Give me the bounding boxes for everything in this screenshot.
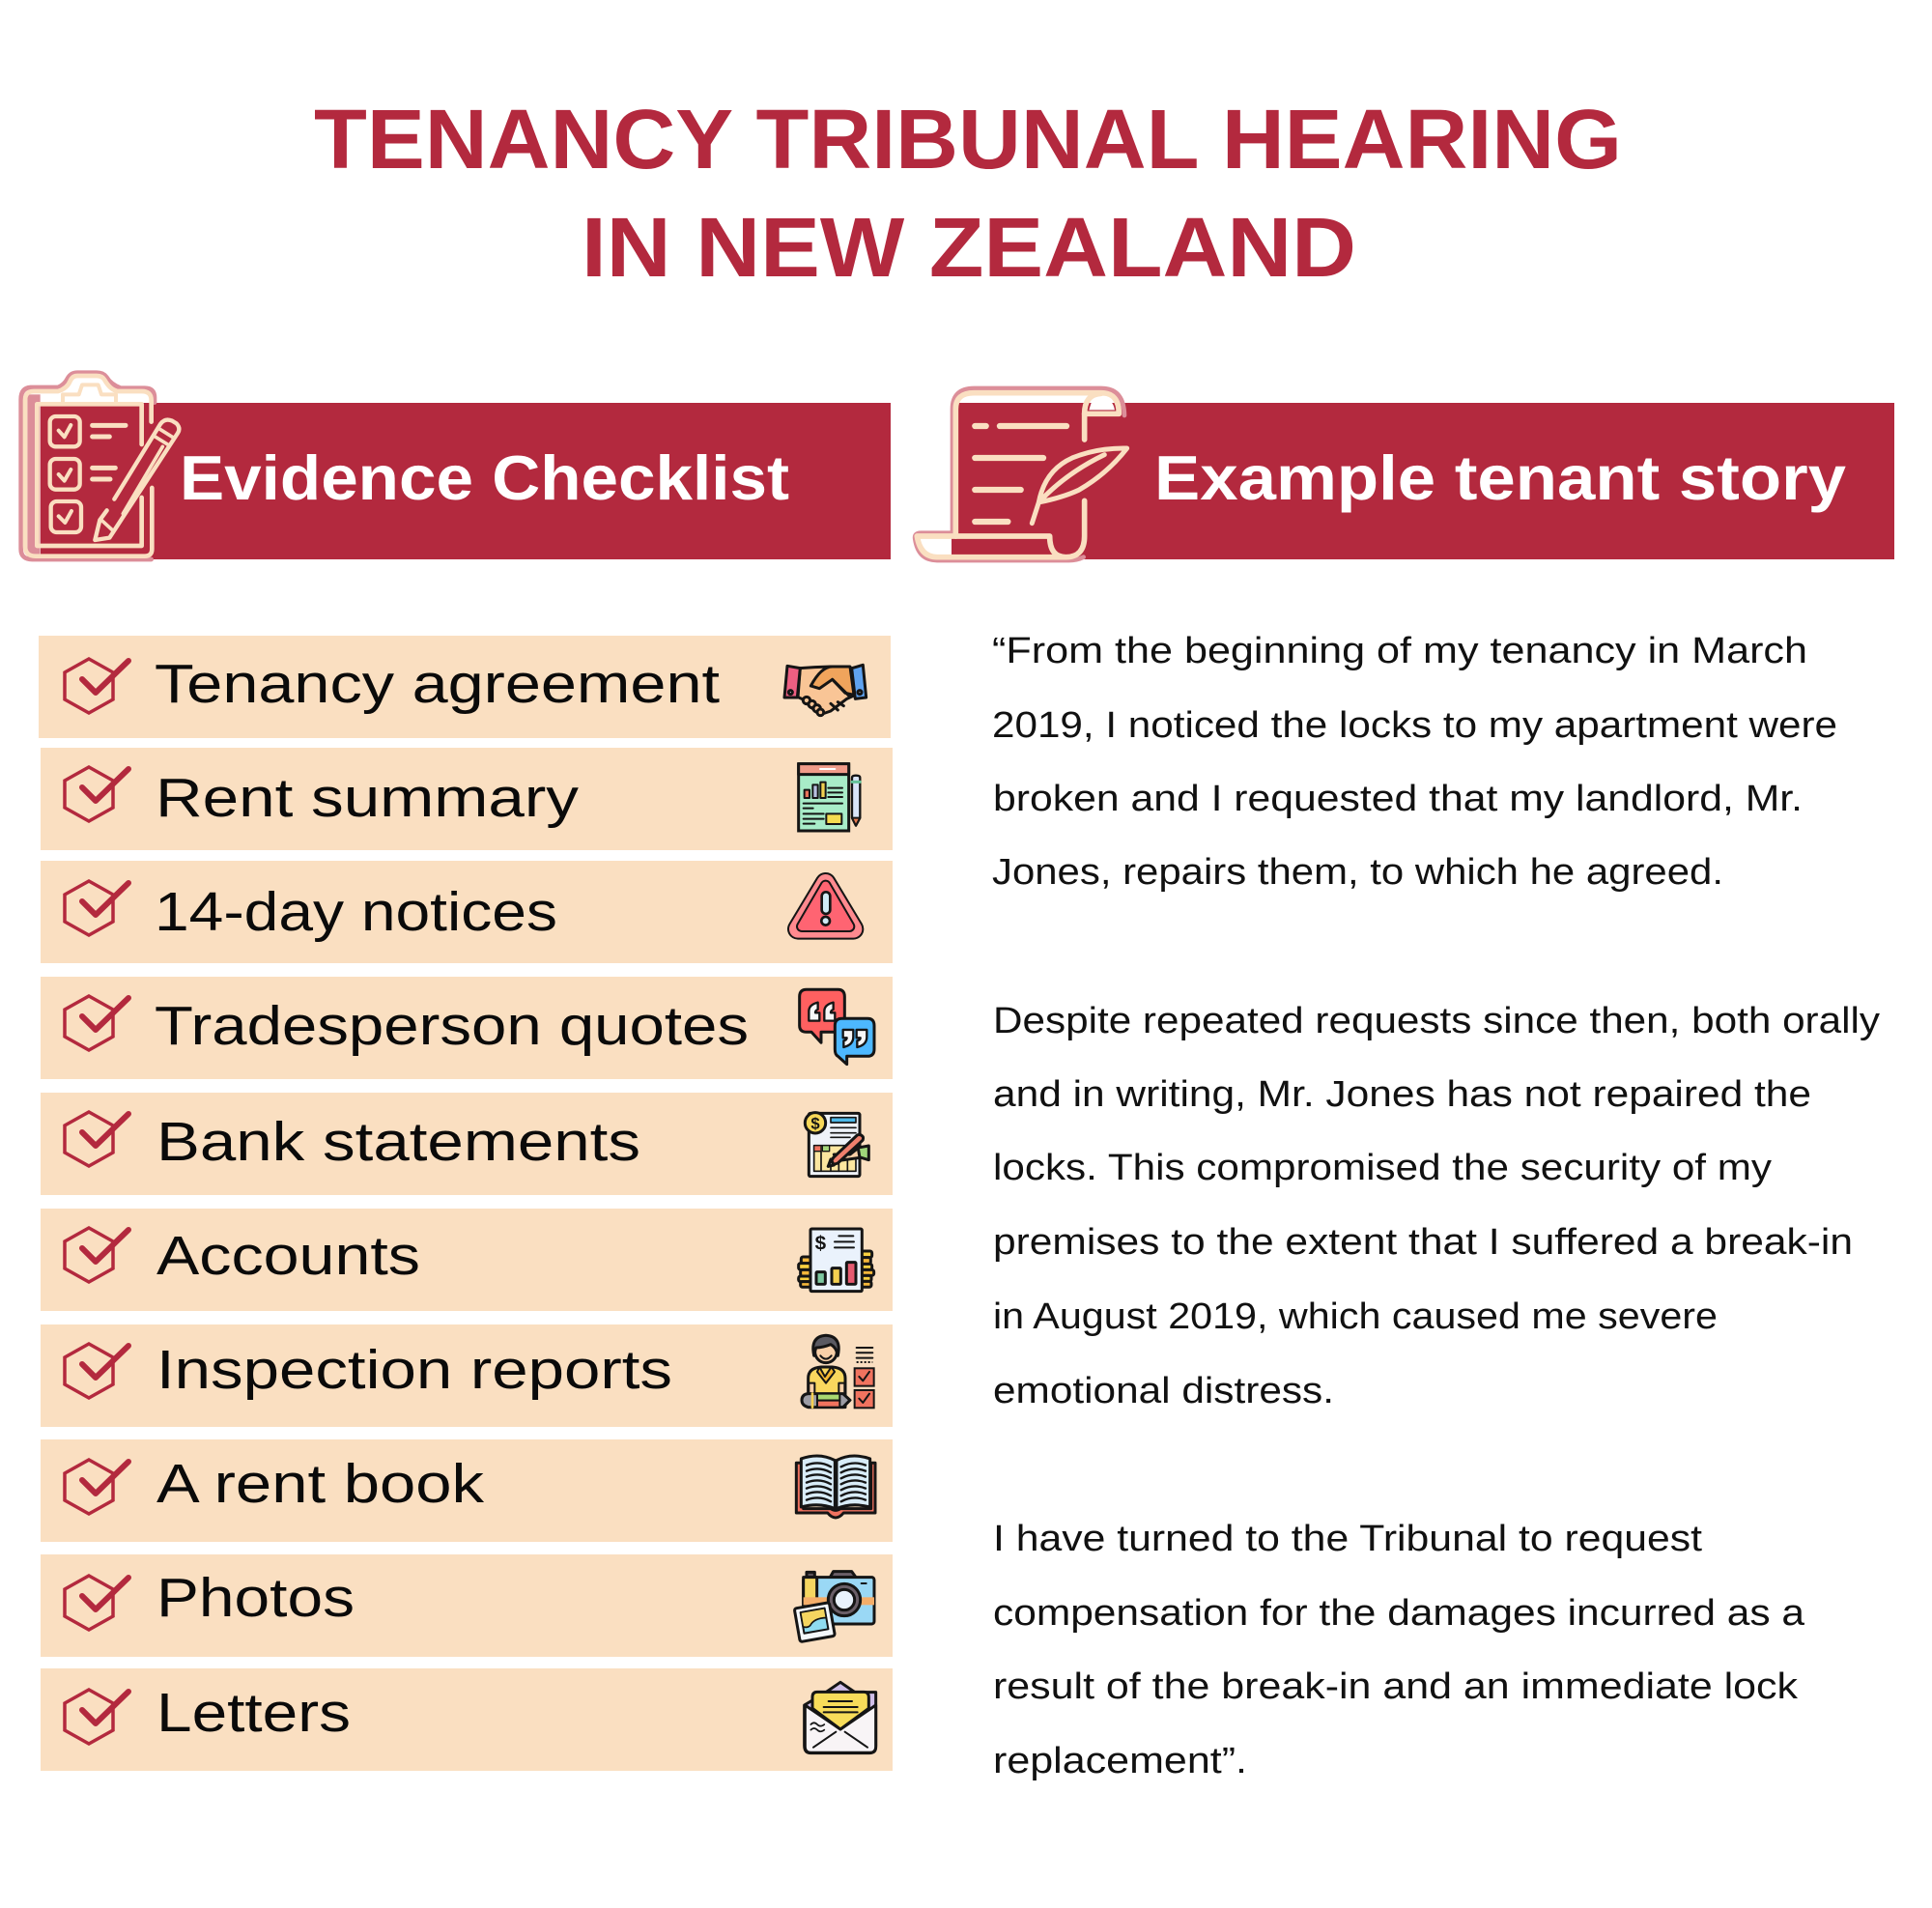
icon: inspector with checklist [802,1335,874,1408]
paragraph 1: “From the beginning of my tenancy in March [992,631,1807,671]
row: a rent book [65,1453,485,1515]
paragraph 1: broken and I requested that my landlord, Mr. [993,779,1803,819]
row: inspection reports: Inspection reports [156,1339,672,1401]
row: rent summary: Rent summary [156,767,580,829]
paragraph 2 [993,1001,1880,1411]
paragraph 2: Despite repeated requests since then, both orally [993,1001,1880,1041]
paragraph 1: 2019, I noticed the locks to my apartment were [992,705,1837,746]
icon: quote speech bubbles [800,989,874,1065]
row: a rent book: A rent book [156,1453,485,1515]
icon: accounts document with coins: $ [815,1232,827,1254]
row: tradesperson quotes: Tradesperson quotes [155,995,749,1057]
paragraph 2: premises to the extent that I suffered a break-in [993,1222,1853,1263]
icon: open rent book [796,1456,875,1518]
icon: bank statement with pencil [805,1113,868,1177]
row: accounts [65,1225,420,1287]
panel: evidence checklist header [21,373,891,559]
icon: scroll with quill [915,388,1127,560]
row: rent summary [65,767,580,829]
text block: tenant story [992,631,1880,1781]
panel: example tenant story header [915,388,1894,560]
title: TENANCY TRIBUNAL HEARING [314,93,1622,186]
paragraph 3: I have turned to the Tribunal to request [993,1519,1702,1559]
row: letters [65,1682,351,1744]
paragraph 2: in August 2019, which caused me severe [993,1296,1718,1337]
paragraph 2: emotional distress. [993,1371,1334,1411]
panel: checklist rows [39,636,893,1771]
row: letters: Letters [156,1682,351,1744]
icon: handshake [784,665,867,716]
title [314,93,1622,295]
paragraph 2: locks. This compromised the security of my [993,1148,1772,1188]
paragraph 3: compensation for the damages incurred as a [993,1593,1805,1634]
row: photos [65,1567,355,1630]
row: tenancy agreement: Tenancy agreement [155,653,720,715]
row: accounts: Accounts [156,1225,420,1287]
title: IN NEW ZEALAND [582,201,1356,295]
heading: example tenant story: Example tenant story [1154,442,1846,513]
icon: summary document with pen [799,764,860,831]
icon: open envelope with letter [805,1682,876,1753]
icon: camera with photo [794,1572,874,1642]
paragraph 3 [993,1519,1805,1781]
paragraph 3: result of the break-in and an immediate lock [993,1666,1799,1707]
paragraph 3: replacement”. [993,1741,1247,1781]
row: photos: Photos [156,1567,355,1629]
icon: clipboard with pencil [21,373,179,559]
icon: bank statement with pencil: $ [810,1114,820,1132]
heading: evidence checklist: Evidence Checklist [180,442,789,513]
paragraph 1: Jones, repairs them, to which he agreed. [992,852,1723,893]
icon: warning triangle [798,883,853,929]
icon: accounts document with coins [799,1229,874,1292]
row: bank statements: Bank statements [156,1111,640,1173]
paragraph 2: and in writing, Mr. Jones has not repaired the [993,1074,1811,1115]
row: 14-day notices: 14-day notices [155,881,557,943]
paragraph 1 [992,631,1837,893]
